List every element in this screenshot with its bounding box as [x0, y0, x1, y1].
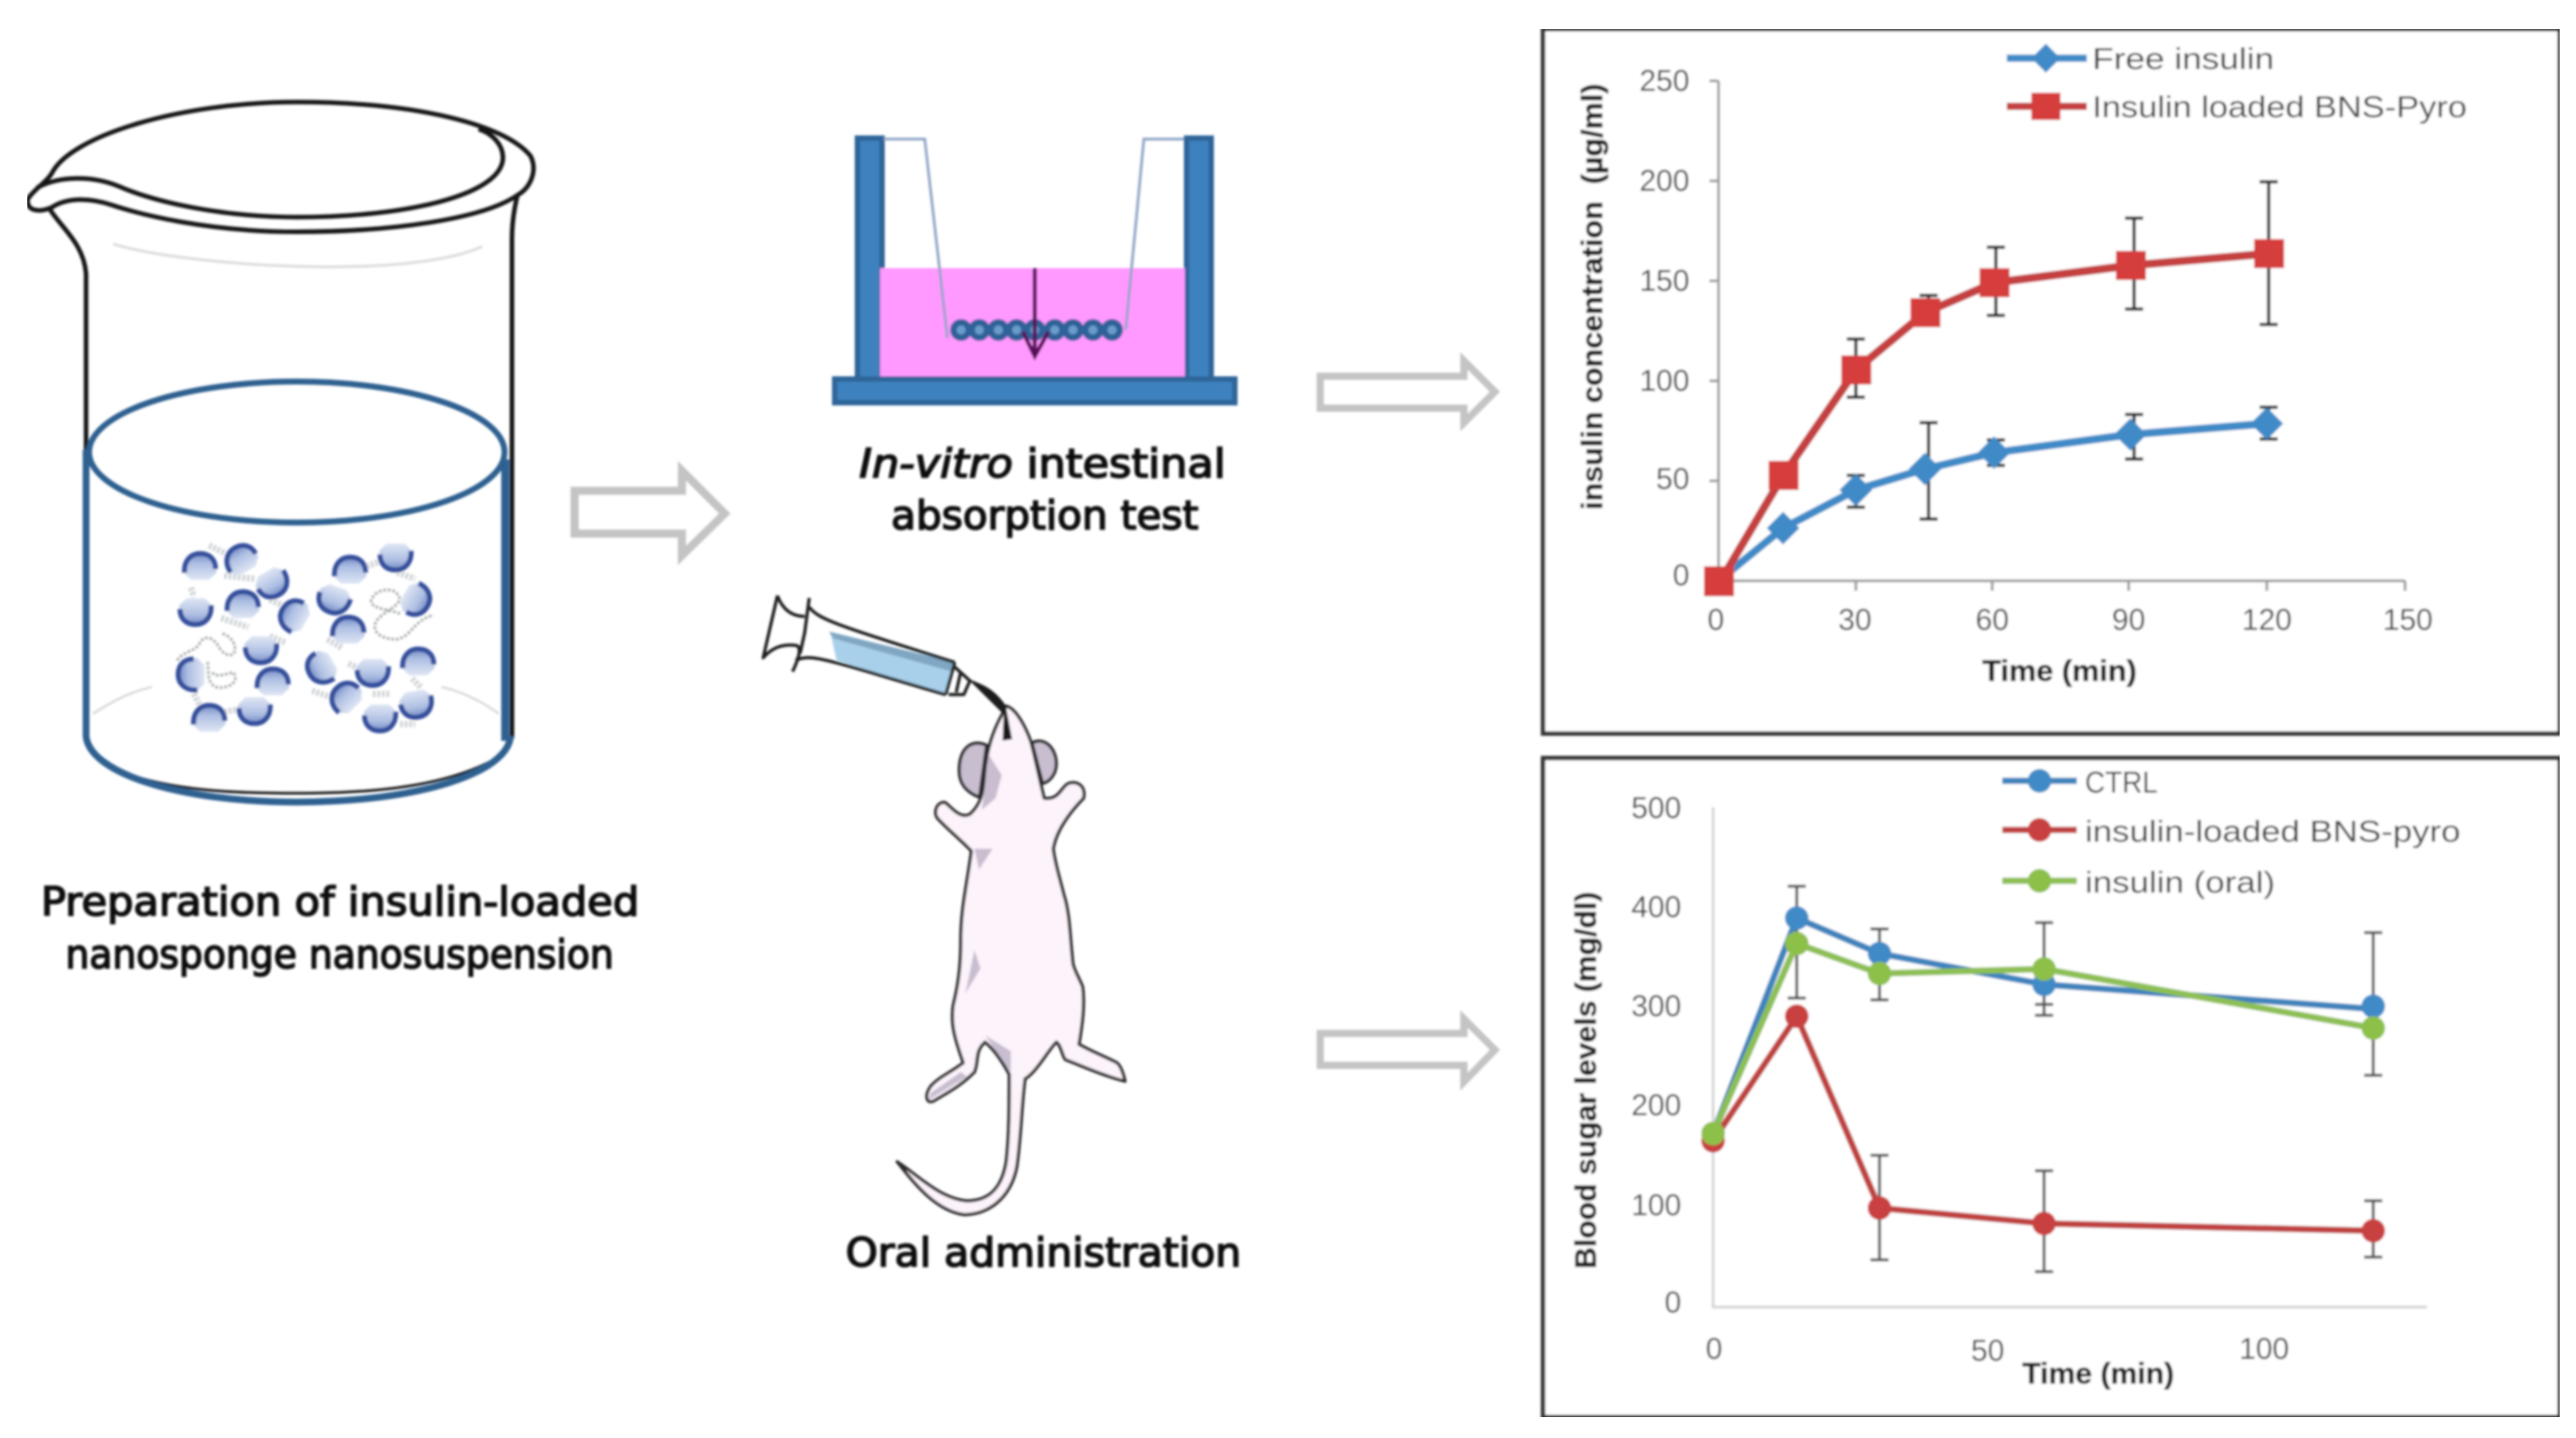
series: insulin loaded BNS-Pyro [1704, 239, 2284, 596]
icon: beaker glass [27, 102, 534, 794]
y axis tick labels: 150 [1639, 264, 1689, 297]
panel: blood sugar chart [1543, 758, 2560, 1417]
arrow: oral dosing to blood sugar chart [1320, 1019, 1495, 1082]
legend: free insulin [2007, 42, 2274, 75]
y axis tick labels: 200 [1631, 1088, 1681, 1122]
chart axes [1713, 807, 2427, 1307]
legend: insulin oral: insulin (oral) [2085, 865, 2275, 899]
x axis title: Time (min) [2022, 1357, 2174, 1390]
chart frame [1543, 758, 2560, 1417]
y axis title: insulin concentration (µg/ml) [1576, 84, 1609, 510]
caption: preparation: nanosponge nanosuspension [65, 932, 614, 978]
icon: syringe liquid shade [829, 632, 955, 672]
icon: liquid level [86, 382, 510, 802]
legend: free insulin: Free insulin [2092, 42, 2274, 75]
y axis tick labels: 400 [1631, 890, 1681, 924]
icon: feeding needle [970, 681, 1011, 739]
icon: mouse shading [929, 754, 1011, 1100]
caption: in-vitro test [859, 441, 1226, 539]
x axis tick labels: 150 [2382, 603, 2433, 636]
icon: insert walls [884, 139, 1184, 338]
y axis tick labels [1631, 791, 1681, 1319]
series: insulin oral [1701, 932, 2385, 1145]
legend: CTRL: CTRL [2085, 765, 2158, 799]
caption: oral administration: Oral administration [846, 1230, 1241, 1276]
x axis title: Time (min) [1982, 654, 2137, 687]
arrow: transport direction [1023, 268, 1048, 356]
x axis tick labels: 50 [1971, 1333, 2004, 1367]
icon: left post [857, 138, 882, 379]
x axis tick labels: 60 [1976, 603, 2009, 636]
x axis tick labels: 90 [2112, 603, 2145, 636]
arrow: in-vitro to absorption chart [1320, 361, 1495, 423]
error bars [1788, 886, 2382, 1272]
caption: in-vitro test: In-vitro intestinal [859, 441, 1226, 487]
x axis tick labels: 0 [1708, 603, 1724, 636]
series: CTRL [1713, 906, 2385, 1133]
error bars [1783, 182, 2278, 540]
chart axes [1709, 81, 2405, 591]
y axis tick labels: 250 [1639, 64, 1689, 97]
x axis tick labels: 30 [1839, 603, 1871, 636]
y axis tick labels: 100 [1631, 1188, 1681, 1222]
y axis tick labels: 100 [1639, 364, 1689, 397]
x axis tick labels: 100 [2239, 1332, 2290, 1365]
y axis tick labels: 500 [1631, 791, 1681, 824]
legend: insulin oral [2002, 865, 2275, 899]
icon: base plate [835, 379, 1235, 403]
x axis tick labels [1708, 603, 2433, 636]
y axis tick labels: 200 [1639, 164, 1689, 197]
panel: transwell insert diagram [835, 138, 1235, 403]
panel: insulin concentration chart [1543, 29, 2560, 734]
y axis tick labels: 300 [1631, 989, 1681, 1023]
icon: mouse left ear [959, 744, 987, 797]
legend: insulin loaded BNS-Pyro: Insulin loaded BNS-Pyro [2092, 90, 2467, 124]
series: free insulin [1719, 407, 2283, 581]
icon: cell monolayer [950, 319, 1123, 341]
x axis tick labels [1706, 1332, 2290, 1367]
icon: mouse body [897, 706, 1125, 1214]
panel: mouse with oral syringe [763, 595, 1125, 1214]
arrow: preparation to tests [575, 471, 725, 555]
icon: linker chains [177, 545, 434, 724]
caption: preparation: Preparation of insulin-loaded [41, 879, 639, 925]
icon: mouse right ear [1032, 741, 1057, 784]
icon: insulin nanosponge particles [177, 539, 436, 732]
panel: beaker with nanosponge suspension [27, 102, 534, 802]
x axis tick labels: 0 [1706, 1332, 1722, 1365]
y axis tick labels [1639, 64, 1689, 592]
icon: right post [1187, 138, 1211, 379]
series: insulin-loaded BNS-pyro [1701, 1004, 2385, 1243]
x axis tick labels: 120 [2241, 603, 2292, 636]
icon: syringe liquid [830, 633, 955, 694]
icon: pink medium [880, 268, 1185, 379]
y axis tick labels: 50 [1656, 462, 1689, 495]
legend: CTRL [2002, 765, 2158, 799]
y axis title: Blood sugar levels (mg/dl) [1569, 892, 1602, 1269]
caption: preparation [41, 879, 639, 978]
icon: syringe outline [763, 595, 970, 694]
y axis tick labels: 0 [1665, 1285, 1681, 1319]
chart frame [1543, 29, 2560, 734]
legend: insulin-loaded BNS-pyro: insulin-loaded BNS-pyro [2085, 814, 2461, 848]
caption: in-vitro test: absorption test [891, 493, 1198, 539]
y axis tick labels: 0 [1673, 558, 1689, 592]
